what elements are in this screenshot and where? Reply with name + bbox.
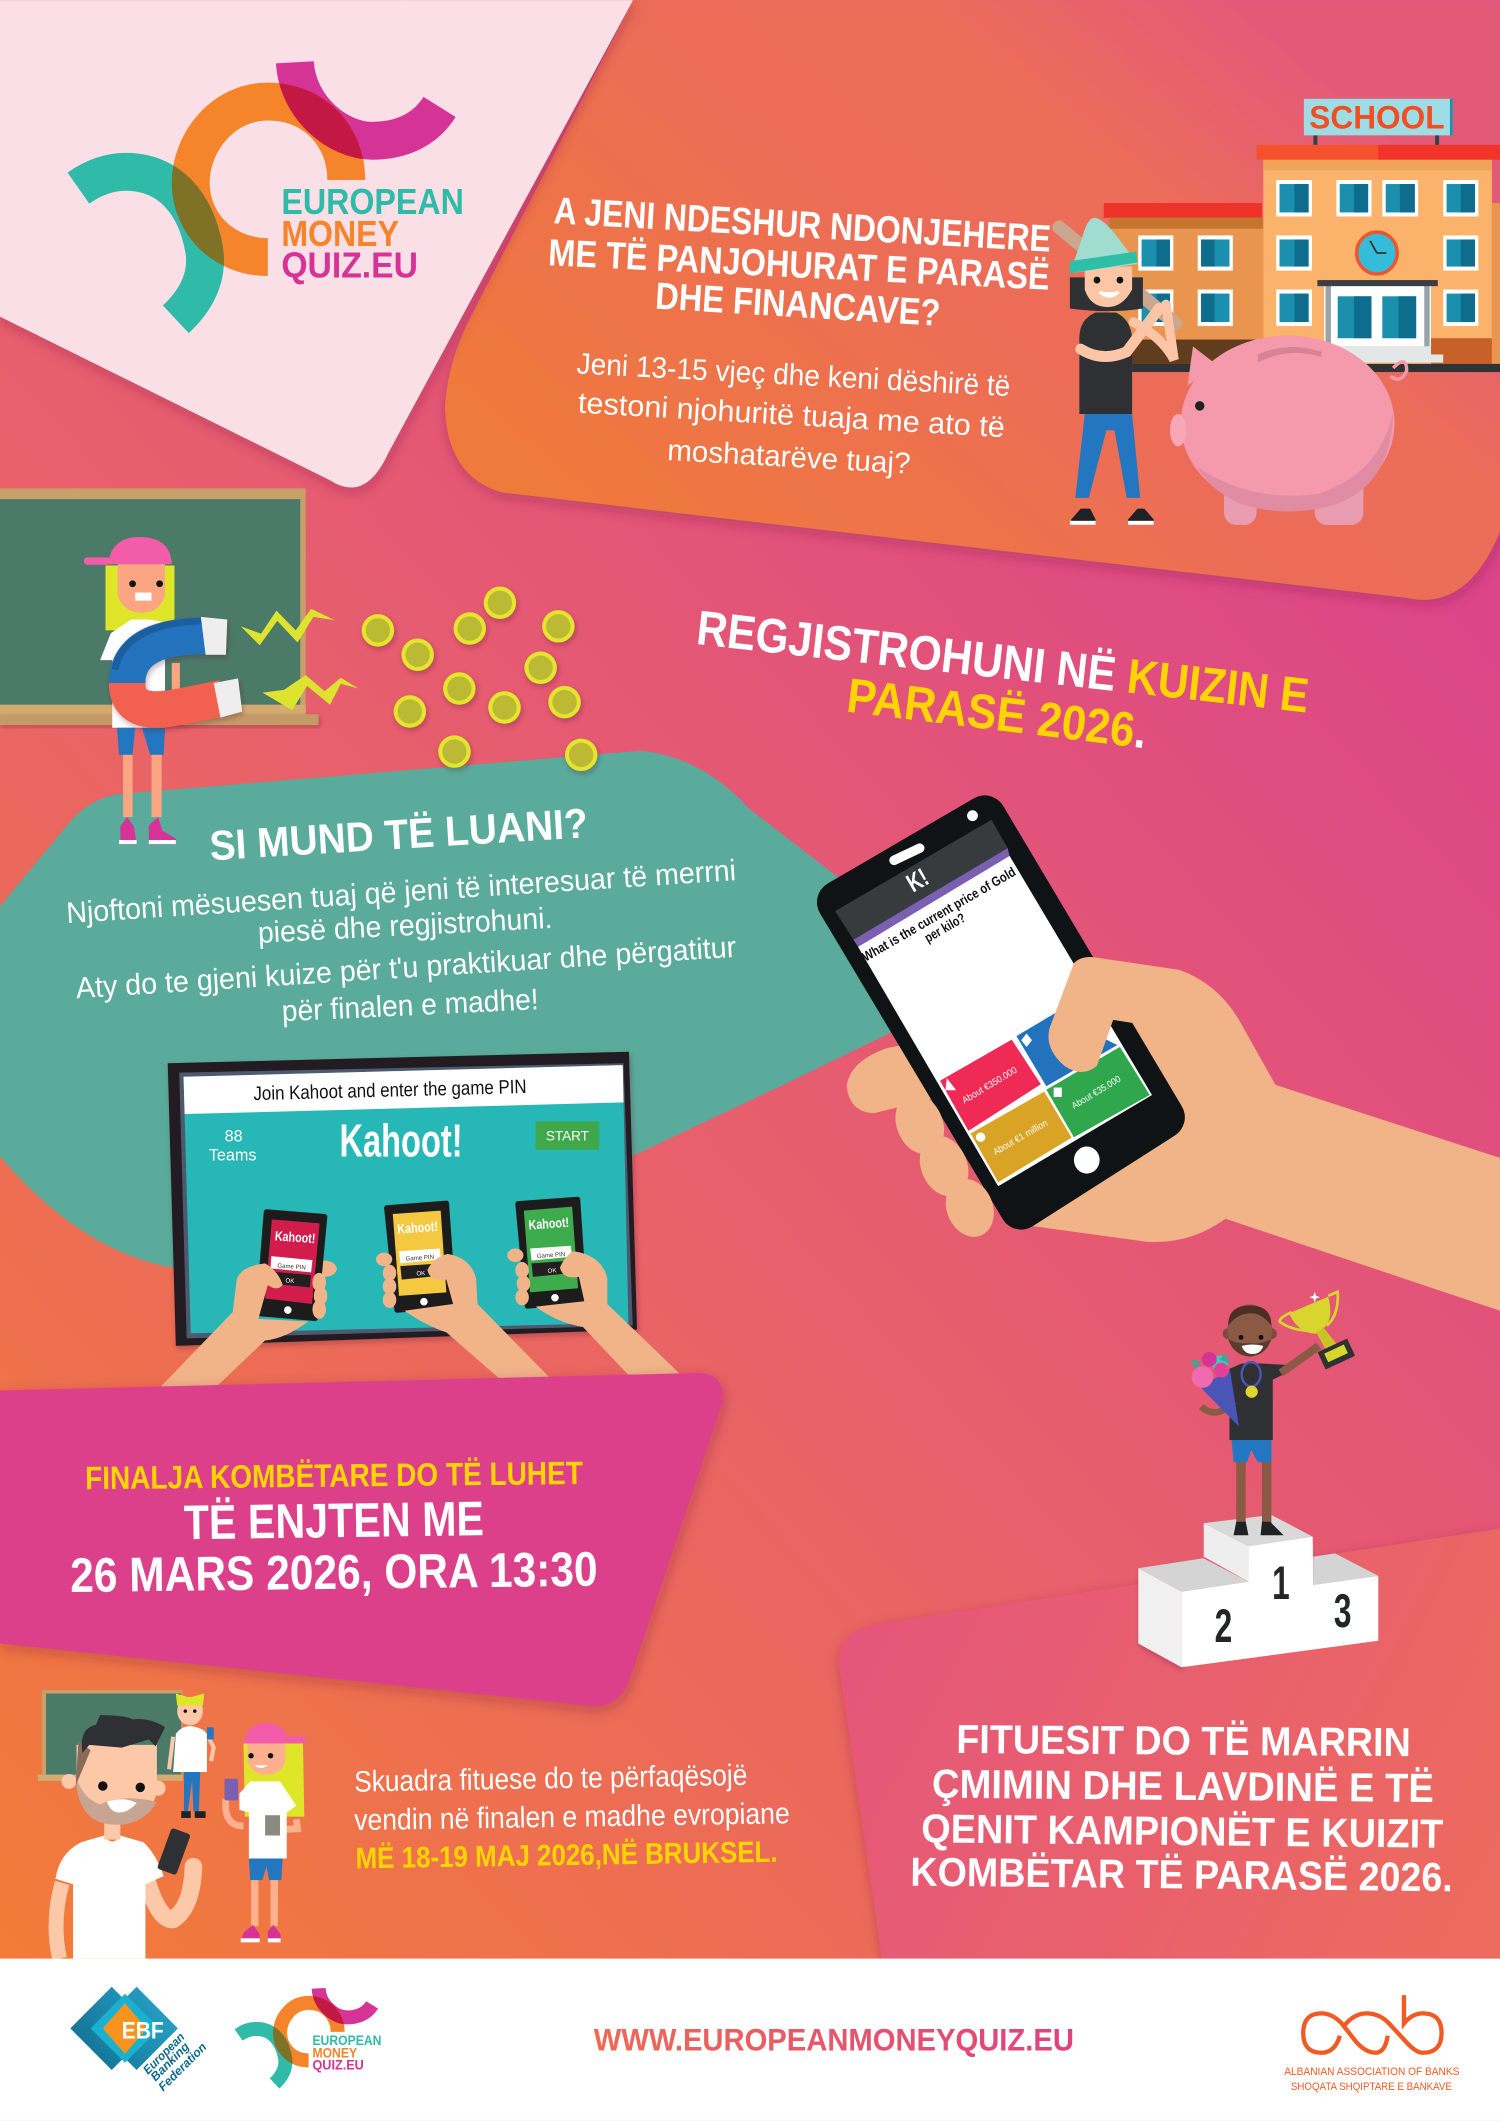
logo: European Banking Federation: European — [140, 2030, 187, 2077]
panel: teal how-to-play blob — [0, 751, 933, 1267]
illustration: large hand holding phone: What is the current price of Gold — [860, 864, 1018, 964]
illustration: school building — [1104, 99, 1500, 372]
illustration: yellow phone in hand: OK — [416, 1270, 426, 1278]
panel: magenta final date banner — [0, 1373, 723, 1706]
logo: European Banking Federation: Banking — [148, 2039, 192, 2084]
illustration: Kahoot screen: Join Kahoot and enter the game PIN — [253, 1076, 527, 1105]
text block: how to play instructions — [65, 854, 737, 1028]
logo: European Money Quiz — [78, 62, 464, 319]
text block: winners prize: FITUESIT DO TË MARRIN — [956, 1716, 1411, 1765]
illustration: yellow phone in hand: Game PIN — [405, 1254, 434, 1263]
illustration: Kahoot screen — [168, 1052, 637, 1346]
illustration: green phone in hand: Game PIN — [537, 1251, 565, 1260]
illustration: yellow phone in hand — [376, 1203, 550, 1378]
illustration: podium: 3 — [1334, 1585, 1351, 1638]
logo: Albanian Association of Banks: ALBANIAN ASSOCIATION OF BANKS — [1284, 2066, 1460, 2078]
illustration: Kahoot screen: Teams — [209, 1147, 257, 1165]
logo: European Money Quiz small: EUROPEAN — [312, 2033, 381, 2048]
logo: European Money Quiz small: MONEY — [312, 2045, 357, 2060]
illustration: red phone in hand: Kahoot! — [274, 1228, 316, 1246]
illustration: Kahoot screen: START — [546, 1128, 589, 1143]
logo: Albanian Association of Banks — [1284, 1995, 1460, 2093]
illustration: large hand holding phone: About €1 million — [991, 1118, 1050, 1158]
logo: European Banking Federation: Federation — [155, 2040, 209, 2094]
text block: how to play instructions: piesë dhe regjistrohuni. — [257, 902, 553, 950]
illustration: Kahoot screen: 88 — [225, 1128, 243, 1146]
illustration: large hand holding phone: K! — [902, 864, 934, 898]
heading: intro question: DHE FINANCAVE? — [654, 276, 942, 335]
panel: orange intro card — [445, 0, 1500, 600]
text block: age question: Jeni 13-15 vjeç dhe keni dëshirë të — [576, 347, 1011, 403]
text block: winners prize — [910, 1716, 1453, 1900]
text block: European final — [354, 1759, 790, 1875]
heading: national final date: 26 MARS 2026, ORA 13:30 — [70, 1543, 598, 1603]
text block: age question — [576, 347, 1011, 481]
heading: how to play: SI MUND TË LUANI? — [208, 799, 589, 869]
illustration: large hand holding phone: About €35.000 — [1070, 1074, 1123, 1112]
illustration: red phone in hand — [160, 1212, 337, 1388]
illustration: girl with bat — [1059, 218, 1175, 525]
heading: registration call: REGJISTROHUNI NË KUIZIN E — [694, 601, 1312, 723]
heading: national final date — [70, 1455, 598, 1603]
illustration: classroom students — [38, 1690, 306, 1959]
logo: European Money Quiz: MONEY — [281, 213, 399, 254]
heading: intro question — [547, 190, 1052, 335]
icon: gold coins — [362, 587, 597, 771]
illustration: chalkboard — [0, 488, 319, 725]
illustration: school building: SCHOOL — [1309, 100, 1445, 136]
heading: registration call: PARASË 2026. — [844, 669, 1150, 759]
heading: intro question: A JENI NDESHUR NDONJEHERE — [553, 190, 1052, 261]
illustration: Kahoot screen: Kahoot! — [339, 1115, 463, 1167]
text block: age question: testoni njohuritë tuaja me ato të — [577, 387, 1006, 444]
text block: how to play instructions: Aty do te gjeni kuize për t'u praktikuar dhe përgatitur — [75, 931, 737, 1005]
footer panel — [0, 1959, 1500, 2121]
panel: bottom-right winners card — [839, 1528, 1500, 1959]
illustration: red phone in hand: Game PIN — [277, 1262, 306, 1271]
text block: European final: Skuadra fituese do te përfaqësojë — [354, 1759, 748, 1799]
panel: pink logo card — [0, 0, 633, 487]
logo: Albanian Association of Banks: SHOQATA SHQIPTARE E BANKAVE — [1291, 2081, 1452, 2093]
icon: lightning bolts — [241, 609, 358, 710]
icon: horseshoe magnet — [115, 617, 242, 718]
text block: age question: moshatarëve tuaj? — [666, 434, 911, 481]
text block: European final: MË 18-19 MAJ 2026,NË BRUKSEL. — [355, 1836, 778, 1875]
illustration: piggy bank — [1170, 336, 1407, 525]
illustration: green phone in hand: Kahoot! — [528, 1215, 570, 1233]
heading: national final date: TË ENJTEN ME — [183, 1492, 484, 1550]
logo: European Money Quiz small: QUIZ.EU — [312, 2058, 364, 2073]
illustration: green phone in hand — [507, 1199, 682, 1376]
illustration: green phone in hand: OK — [547, 1267, 557, 1275]
logo: European Money Quiz small — [239, 1988, 381, 2083]
illustration: podium: 1 — [1272, 1557, 1290, 1610]
website address: WWW.EUROPEANMONEYQUIZ.EU — [594, 2023, 1074, 2058]
illustration: large hand holding phone — [835, 810, 1500, 1311]
text block: how to play instructions: për finalen e madhe! — [281, 983, 539, 1028]
heading: national final date: FINALJA KOMBËTARE DO TË LUHET — [85, 1455, 583, 1496]
illustration: winner with trophy and bouquet — [1190, 1292, 1355, 1535]
text block: winners prize: KOMBËTAR TË PARASË 2026. — [910, 1849, 1453, 1900]
logo: European Money Quiz: QUIZ.EU — [281, 244, 418, 285]
illustration: yellow phone in hand: Kahoot! — [397, 1219, 438, 1237]
text block: how to play instructions: Njoftoni mësuesen tuaj që jeni të interesuar të merrni — [65, 854, 737, 930]
logo: European Banking Federation — [70, 1987, 209, 2094]
text block: winners prize: QENIT KAMPIONËT E KUIZIT — [921, 1805, 1444, 1857]
illustration: podium — [1138, 1515, 1378, 1667]
heading: intro question: ME TË PANJOHURAT E PARASË — [547, 231, 1051, 299]
illustration: red phone in hand: OK — [285, 1277, 295, 1285]
illustration: large hand holding phone: About €350.000 — [960, 1065, 1019, 1106]
text block: European final: vendin në finalen e madhe evropiane — [354, 1797, 790, 1837]
illustration: girl with horseshoe magnet — [84, 537, 242, 844]
illustration: podium: 2 — [1215, 1600, 1232, 1653]
logo: European Money Quiz: EUROPEAN — [281, 181, 464, 222]
illustration: large hand holding phone: per kilo? — [922, 910, 968, 945]
logo: European Banking Federation: EBF — [122, 2017, 164, 2044]
text block: winners prize: ÇMIMIN DHE LAVDINË E TË — [932, 1761, 1434, 1811]
